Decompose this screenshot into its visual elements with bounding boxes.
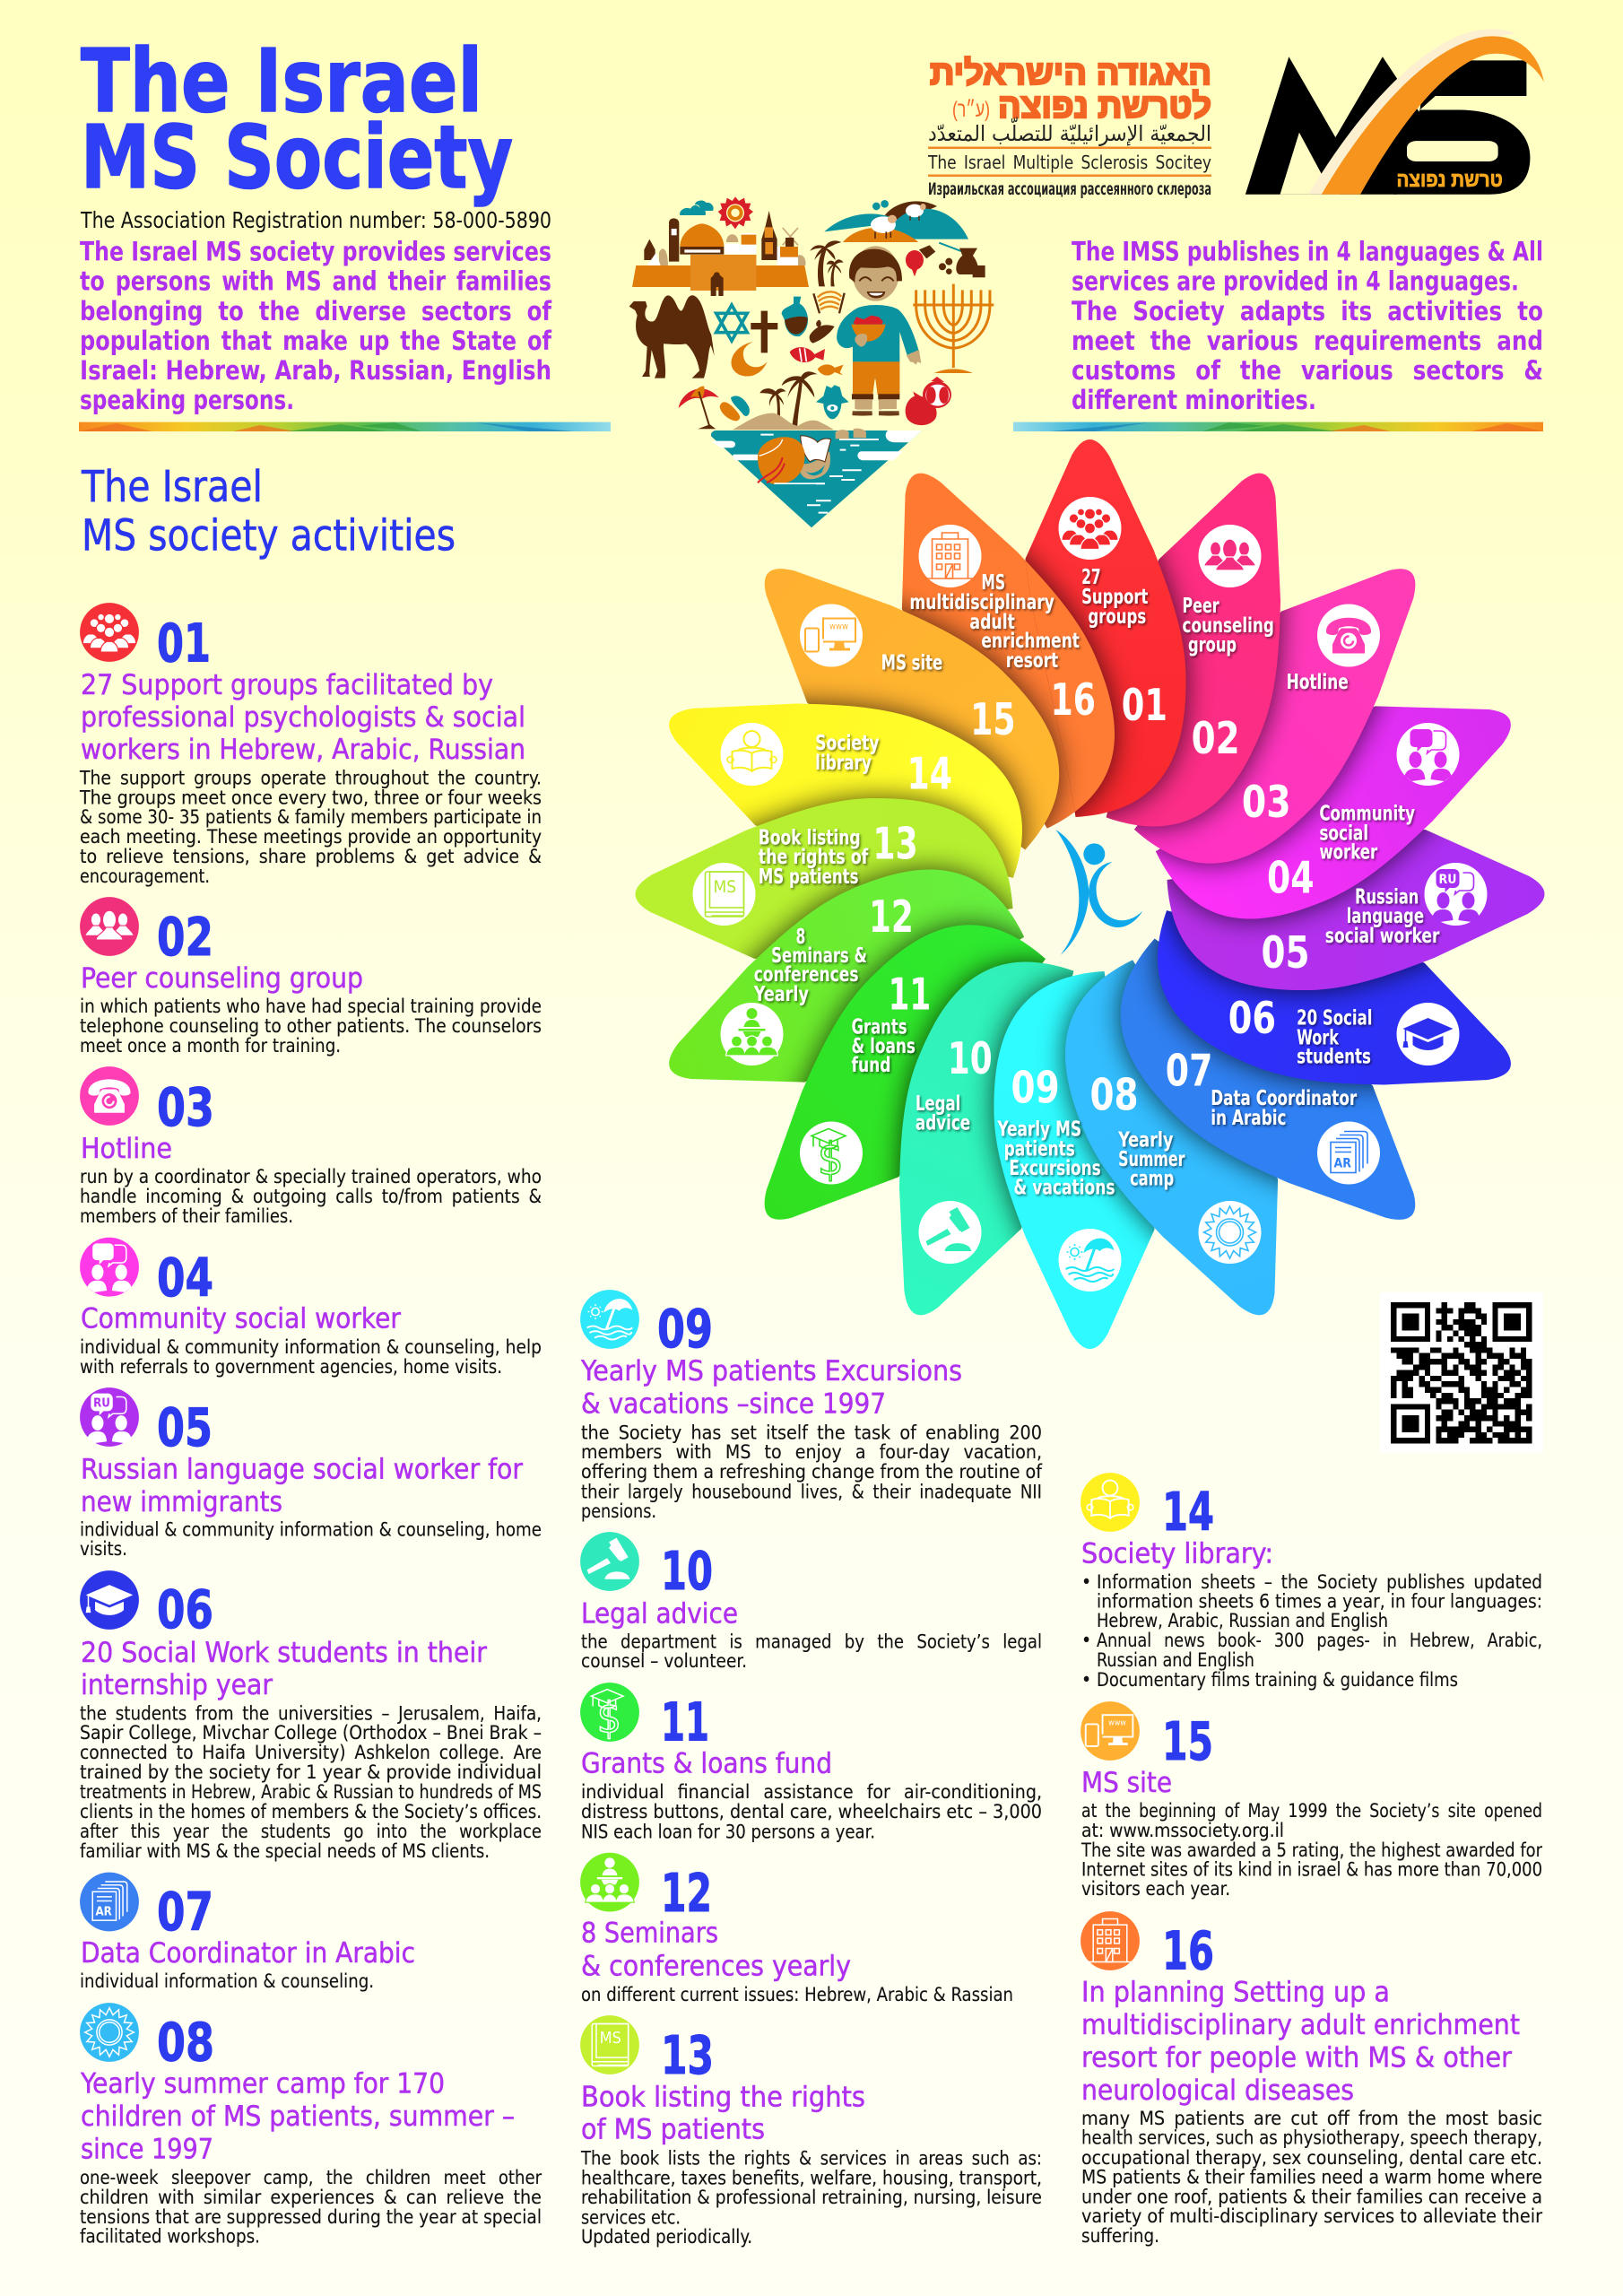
petal labels: worker <box>1319 839 1377 864</box>
petal numbers: 09 <box>1011 1063 1060 1114</box>
body 01: each meeting. These meetings provide an opportunity <box>80 826 542 848</box>
body 11: individual financial assistance for air-conditioning, <box>581 1781 1042 1803</box>
petal labels: fund <box>852 1052 891 1077</box>
body 16: suffering. <box>1081 2225 1159 2247</box>
petal labels: Support <box>1081 584 1148 609</box>
petal labels: Peer <box>1183 593 1219 618</box>
body 06: trained by the society for 1 year & provide individual <box>80 1761 542 1783</box>
heading 11: Grants & loans fund <box>581 1747 832 1779</box>
body 09: their largely housebound lives, & their inadequate NII <box>581 1482 1042 1503</box>
petal labels: adult <box>969 609 1015 634</box>
petal labels: camp <box>1130 1166 1174 1190</box>
icon: seminar <box>580 1853 639 1912</box>
petal numbers: 16 <box>1051 674 1096 726</box>
petal labels: 20 Social <box>1297 1005 1372 1030</box>
flower icons <box>692 497 1487 1292</box>
petal numbers: 06 <box>1228 993 1276 1044</box>
number 10: 10 <box>661 1540 713 1602</box>
icon: book <box>580 2015 639 2074</box>
petal labels: enrichment <box>981 628 1080 653</box>
heading 12: 8 Seminars <box>581 1918 718 1950</box>
intro text block right: customs of the various sectors & <box>1072 355 1543 386</box>
title: The Israel <box>81 30 482 132</box>
body 13: rehabilitation & professional retraining, nursing, leisure <box>581 2187 1042 2208</box>
icon: support groups <box>80 603 139 662</box>
body 02: in which patients who have had special training provide <box>80 996 542 1017</box>
number 13: 13 <box>661 2024 714 2086</box>
heading 01 <box>81 669 525 766</box>
body 14 bullets: Hebrew, Arabic, Russian and English <box>1097 1610 1388 1631</box>
petal labels: MS <box>981 570 1005 595</box>
body 06: the students from the universities – Jerusalem, Haifa, <box>80 1702 542 1724</box>
heading 13 <box>581 2081 865 2145</box>
QR code <box>1380 1292 1543 1453</box>
intro text block left: belonging to the diverse sectors of <box>80 296 552 326</box>
heading 08: since 1997 <box>81 2133 213 2165</box>
petal 08 <box>1045 960 1279 1315</box>
icon: russian language social worker <box>80 1387 139 1447</box>
intro text block left: Israel: Hebrew, Arab, Russian, English <box>80 355 551 386</box>
body 01: encouragement. <box>80 865 210 887</box>
body 03: handle incoming & outgoing calls to/from patients & <box>80 1186 542 1207</box>
petal labels: Russian <box>1355 883 1419 909</box>
icon: documents <box>80 1873 139 1931</box>
activity 13 <box>580 2015 1042 2248</box>
menorah <box>913 284 994 373</box>
petal numbers: 02 <box>1192 713 1240 765</box>
heading 03: Hotline <box>81 1133 172 1165</box>
number 11: 11 <box>661 1692 709 1753</box>
body 15: at: www.mssociety.org.il <box>1081 1820 1284 1841</box>
heading 08: children of MS patients, summer – <box>81 2100 515 2133</box>
petal 10 <box>879 942 1074 1315</box>
petal labels: MS patients <box>759 864 858 889</box>
multilingual society wordmark: לטרשת נפוצה <box>998 88 1211 126</box>
body 09: pensions. <box>581 1500 656 1522</box>
intro text block left <box>80 237 552 415</box>
heading 16: multidisciplinary adult enrichment <box>1081 2009 1520 2041</box>
petal 09 <box>994 971 1155 1349</box>
petal 11 <box>764 905 1046 1220</box>
body 14 bullets: Documentary films training & guidance films <box>1097 1669 1458 1691</box>
petal labels: Community <box>1319 800 1415 825</box>
number 07: 07 <box>157 1881 213 1943</box>
body 04: with referrals to government agencies, home visits. <box>80 1356 502 1378</box>
petal labels: Seminars & <box>771 943 867 968</box>
heading 08: Yearly summer camp for 170 <box>80 2068 445 2100</box>
body 06: familiar with MS & the special needs of MS clients. <box>80 1840 490 1862</box>
icon: sun <box>80 2003 139 2062</box>
activity 09 <box>580 1290 1043 1522</box>
activity 14 <box>1081 1473 1542 1691</box>
intro text block left: speaking persons. <box>80 385 294 415</box>
heading 16: resort for people with MS & other <box>1081 2041 1513 2074</box>
body 16: MS patients & their families need a warm home where <box>1081 2167 1542 2188</box>
heading 16 <box>1081 1977 1520 2107</box>
petal numbers: 15 <box>970 694 1016 745</box>
heading 05: Russian language social worker for <box>81 1454 524 1486</box>
petal labels: language <box>1347 903 1424 928</box>
body 14 bullets: • <box>1081 1571 1091 1593</box>
body 05: individual & community information & counseling, home <box>80 1519 542 1541</box>
heading 01: 27 Support groups facilitated by <box>81 669 493 701</box>
petal labels: advice <box>916 1109 970 1135</box>
body 14 bullets: Information sheets – the Society publishes updated <box>1097 1571 1542 1593</box>
heading 13: of MS patients <box>581 2113 765 2145</box>
petal labels: patients <box>1004 1136 1075 1161</box>
activity 05 <box>80 1387 542 1560</box>
sea and beach <box>711 413 922 527</box>
petal labels: conferences <box>754 961 858 987</box>
number 16: 16 <box>1162 1919 1214 1981</box>
body 15 <box>1081 1800 1542 1900</box>
petal 16 <box>856 438 1149 848</box>
body 06: treatments in Hebrew, Arabic & Russian to hundreds of MS <box>80 1781 542 1803</box>
activity 07 <box>80 1873 415 1992</box>
body 03 <box>80 1166 542 1227</box>
petal 16 overlap on petal 01 <box>723 438 1149 885</box>
heading 10: Legal advice <box>581 1598 738 1631</box>
heading 13: Book listing the rights <box>581 2081 865 2113</box>
body 16: variety of multi-disciplinary services to alleviate their <box>1081 2205 1542 2227</box>
petal 01 <box>1026 439 1186 817</box>
heading 09: Yearly MS patients Excursions <box>580 1355 962 1387</box>
body 03: members of their families. <box>80 1205 293 1227</box>
activity 12 <box>580 1853 1013 2005</box>
heading 08 <box>80 2068 515 2165</box>
petal 03 <box>1098 527 1480 908</box>
heading 12 <box>581 1918 851 1982</box>
body 06: connected to Haifa University) Ashkelon college. Are <box>80 1742 542 1763</box>
icon: devices <box>1081 1701 1140 1761</box>
intro text block left: population that make up the State of <box>80 326 552 356</box>
body 16: many MS patients are cut off from the most basic <box>1081 2108 1542 2129</box>
body 09: members with MS to enjoy a four-day vacation, <box>581 1441 1042 1463</box>
activity 06 <box>80 1570 542 1862</box>
religious symbols <box>716 305 777 377</box>
multilingual society wordmark: (ע״ר) <box>952 98 990 122</box>
heading 04: Community social worker <box>81 1303 402 1335</box>
body 02: telephone counseling to other patients. The counselors <box>80 1015 542 1037</box>
number 14: 14 <box>1162 1481 1214 1543</box>
body 01: The groups meet once every two, three or four weeks <box>79 787 542 809</box>
petal numbers <box>869 674 1315 1121</box>
body 15: at the beginning of May 1999 the Society’s site opened <box>1081 1800 1542 1822</box>
icon: graduation cap <box>80 1570 139 1630</box>
heading 09 <box>580 1355 962 1421</box>
body 07: individual information & counseling. <box>80 1970 374 1992</box>
petal labels: Yearly <box>753 981 809 1006</box>
petal labels: Work <box>1297 1024 1339 1049</box>
petal labels: Book listing <box>759 825 861 849</box>
petal 13 <box>635 798 1013 959</box>
number 15: 15 <box>1162 1710 1213 1772</box>
petal labels <box>753 564 1440 1199</box>
activity 04 <box>80 1238 542 1378</box>
body 10: counsel – volunteer. <box>581 1650 747 1672</box>
body 01: The support groups operate throughout the country. <box>79 768 542 789</box>
petal 14 <box>669 683 1042 878</box>
petal labels: social <box>1319 820 1368 845</box>
icon: hotline telephone <box>80 1066 139 1126</box>
body 16: health services, such as physiotherapy, speech therapy, <box>1081 2127 1542 2149</box>
body 11: NIS each loan for 30 persons a year. <box>581 1821 875 1842</box>
body 03: run by a coordinator & specially trained operators, who <box>80 1166 542 1187</box>
petal 12 <box>669 848 1024 1083</box>
multilingual society wordmark: Израильская ассоциация рассеянного склероза <box>928 179 1211 199</box>
petal labels: multidisciplinary <box>909 589 1055 614</box>
body 14 bullets: information sheets 6 times a year, in four languages: <box>1097 1591 1542 1613</box>
intro text block right: The IMSS publishes in 4 languages & All <box>1072 237 1543 267</box>
body 14 bullets: • <box>1081 1669 1091 1691</box>
petal labels: Summer <box>1118 1146 1185 1171</box>
petal labels: Excursions <box>1009 1155 1101 1180</box>
petal labels: Hotline <box>1287 669 1349 694</box>
number 02: 02 <box>157 906 213 968</box>
body 05 <box>80 1519 542 1560</box>
body 05: visits. <box>80 1538 127 1560</box>
body 13: The book lists the rights & services in areas such as: <box>580 2148 1042 2170</box>
petal 05 <box>1167 830 1545 990</box>
intro text block right: meet the various requirements and <box>1072 326 1543 356</box>
heading 06 <box>81 1637 488 1701</box>
number 05: 05 <box>157 1396 213 1458</box>
palms <box>759 240 844 426</box>
petal numbers: 10 <box>948 1033 993 1084</box>
body 16: under one roof, patients & their families can receive a <box>1081 2187 1542 2208</box>
camel <box>629 295 715 378</box>
icon: dollar and cap <box>580 1683 639 1744</box>
body 02 <box>80 996 542 1057</box>
petal labels: Grants <box>852 1014 907 1039</box>
rainbow bar left <box>79 422 611 431</box>
body 09 <box>581 1422 1043 1522</box>
body 04 <box>80 1336 542 1378</box>
body 15: visitors each year. <box>1081 1878 1230 1900</box>
petal labels: group <box>1188 632 1237 657</box>
body 08 <box>80 2167 542 2248</box>
intro text block left: to persons with MS and their families <box>80 266 551 297</box>
body 06: Sapir College, Mivchar College (Orthodox – Bnei Brak – <box>80 1722 542 1744</box>
multilingual society wordmark: The Israel Multiple Sclerosis Socitey <box>927 152 1211 173</box>
body 11: distress buttons, dental care, wheelchairs etc – 3,000 <box>581 1801 1042 1822</box>
multilingual society wordmark: الجمعيّة الإسرائيليّة للتصلّب المتعدّد <box>928 117 1211 146</box>
title: MS Society <box>81 107 513 208</box>
activity 15 <box>1081 1701 1542 1900</box>
flower center disc <box>1001 804 1180 984</box>
section heading: activities: The Israel <box>81 462 263 512</box>
body 08: children with similar experiences & can relieve the <box>80 2187 542 2208</box>
body 08: facilitated workshops. <box>80 2226 260 2248</box>
petal numbers: 14 <box>907 748 952 800</box>
petal numbers: 01 <box>1122 680 1167 731</box>
petal labels: MS site <box>881 650 942 674</box>
flower labels and numbers <box>753 564 1440 1199</box>
heading 06: 20 Social Work students in their <box>81 1637 488 1669</box>
body 14 bullets: Russian and English <box>1097 1649 1254 1671</box>
body 13: healthcare, taxes benefits, welfare, housing, transport, <box>581 2167 1042 2188</box>
heading 14: Society library: <box>1081 1537 1273 1570</box>
petal numbers: 13 <box>872 819 918 870</box>
flower diagram of 16 activities <box>633 438 1547 1351</box>
body 15: The site was awarded a 5 rating, the highest awarded for <box>1081 1839 1542 1861</box>
body 12: on different current issues: Hebrew, Arabic & Rassian <box>581 1984 1013 2005</box>
body 14 bullets <box>1081 1571 1542 1691</box>
petal 06 <box>1137 910 1511 1105</box>
title <box>81 30 513 208</box>
activity 08 <box>80 2003 542 2248</box>
petal labels: social worker <box>1325 923 1440 948</box>
activity 02 <box>80 897 542 1057</box>
hamsa <box>816 385 849 419</box>
body 13 <box>580 2148 1042 2248</box>
center emblem <box>1055 830 1142 955</box>
heading 15: MS site <box>1081 1767 1172 1799</box>
activity 11 <box>580 1683 1042 1842</box>
intro text block right: services are provided in 4 languages. <box>1072 266 1519 297</box>
heading 07: Data Coordinator in Arabic <box>81 1937 415 1970</box>
number 12: 12 <box>661 1862 712 1924</box>
petal labels: the rights of <box>759 844 869 869</box>
petal labels: in Arabic <box>1211 1105 1287 1130</box>
body 01 <box>79 768 542 887</box>
icon: reader <box>1081 1473 1140 1532</box>
petal numbers: 08 <box>1089 1069 1139 1121</box>
body 06: after this year the students go into the workplace <box>80 1821 542 1842</box>
heading 06: internship year <box>81 1669 273 1701</box>
petal labels: Data Coordinator <box>1211 1085 1357 1110</box>
activity 03 <box>80 1066 542 1227</box>
grapes coffee <box>906 243 985 277</box>
icon: community social worker <box>80 1238 139 1297</box>
city skyline <box>632 211 809 296</box>
petal numbers: 03 <box>1242 777 1291 829</box>
petal labels: 8 <box>796 924 805 949</box>
body 11 <box>581 1781 1042 1842</box>
petal labels: Yearly <box>1117 1127 1173 1152</box>
number 08: 08 <box>157 2011 214 2074</box>
rainbow bar right <box>1013 422 1543 431</box>
petal labels: & loans <box>852 1033 916 1058</box>
multilingual society wordmark: האגודה הישראלית <box>930 55 1211 92</box>
petal numbers: 11 <box>889 969 931 1021</box>
MS logo <box>1245 29 1544 195</box>
petal 07 <box>1101 938 1415 1220</box>
body 16: occupational therapy, sex counseling, dental care etc. <box>1081 2147 1542 2169</box>
petal 15 <box>764 569 1074 850</box>
body 10: the department is managed by the Society’s legal <box>581 1631 1042 1652</box>
body 13: services etc. <box>581 2207 681 2229</box>
body 14 bullets: • <box>1081 1630 1091 1651</box>
heading 02: Peer counseling group <box>81 962 363 995</box>
number 01: 01 <box>157 612 211 674</box>
intro text block right: The Society adapts its activities to <box>1072 296 1543 326</box>
icon: beach <box>580 1290 639 1349</box>
body 08: one-week sleepover camp, the children meet other <box>80 2167 542 2188</box>
jug olive scroll fish <box>782 291 845 376</box>
body 01: & some 30- 35 patients & family members participate in <box>80 806 542 828</box>
section heading: activities: MS society activities <box>82 511 456 561</box>
icon: peer counseling <box>80 897 139 956</box>
registration number: The Association Registration number: 58-000-5890 <box>80 207 551 233</box>
heading 16: neurological diseases <box>1081 2074 1354 2107</box>
petal numbers: 12 <box>869 891 914 944</box>
icon: building <box>1081 1911 1140 1970</box>
section heading: activities <box>81 462 456 561</box>
body 06 <box>80 1702 542 1862</box>
petal labels: students <box>1297 1044 1371 1068</box>
body 13: Updated periodically. <box>581 2226 752 2248</box>
boy figure <box>837 246 921 416</box>
petal labels: groups <box>1088 604 1146 629</box>
activity 16 <box>1081 1911 1542 2247</box>
body 14 bullets: Annual news book- 300 pages- in Hebrew, Arabic, <box>1097 1630 1542 1651</box>
body 10 <box>581 1631 1042 1672</box>
petal 04 <box>1155 706 1511 940</box>
petal labels: library <box>815 750 872 775</box>
activity 01 <box>79 603 542 887</box>
petal numbers: 04 <box>1267 852 1315 904</box>
body 16 <box>1081 2108 1542 2247</box>
body 08: tensions that are suppressed during the year at special <box>80 2206 542 2228</box>
heart illustration <box>629 196 994 527</box>
body 06: clients in the homes of members & the Society’s offices. <box>80 1801 542 1822</box>
heading 01: professional psychologists & social <box>81 701 525 734</box>
petal labels: Legal <box>916 1091 960 1116</box>
petal numbers: 07 <box>1166 1045 1212 1097</box>
petal labels: & vacations <box>1013 1175 1115 1199</box>
petal labels: Yearly MS <box>997 1117 1081 1141</box>
heading 09: & vacations –since 1997 <box>581 1388 886 1421</box>
MS logo: טרשת נפוצה <box>1396 169 1503 191</box>
body 09: offering them a refreshing change from the routine of <box>581 1461 1043 1483</box>
hills and sheep <box>824 200 968 242</box>
petal labels: Society <box>815 730 880 755</box>
heading 05 <box>81 1454 524 1518</box>
number 03: 03 <box>157 1076 214 1138</box>
pomegranate <box>906 377 951 425</box>
body 09: the Society has set itself the task of enabling 200 <box>581 1422 1042 1444</box>
body 02: meet once a month for training. <box>80 1035 341 1057</box>
umbrella sandals <box>679 387 750 429</box>
body 01: to relieve tensions, share problems & get advice & <box>80 846 542 867</box>
petal 02 <box>1060 449 1352 860</box>
heading 05: new immigrants <box>81 1486 282 1518</box>
petal labels: resort <box>1006 648 1058 673</box>
icon: gavel <box>580 1532 639 1591</box>
body 04: individual & community information & counseling, help <box>80 1336 542 1358</box>
petal numbers: 05 <box>1261 927 1310 978</box>
heading 12: & conferences yearly <box>581 1950 851 1982</box>
intro text block left: The Israel MS society provides services <box>80 237 551 267</box>
body 15: Internet sites of its kind in israel & has more than 70,000 <box>1081 1859 1542 1881</box>
number 06: 06 <box>157 1578 213 1640</box>
petal labels: 27 <box>1081 564 1101 589</box>
clouds and sun <box>680 196 753 229</box>
activity 10 <box>580 1532 1042 1672</box>
petal labels: counseling <box>1183 613 1274 638</box>
intro text block right <box>1072 237 1543 415</box>
number 04: 04 <box>157 1247 213 1309</box>
multilingual society wordmark <box>927 55 1211 199</box>
number 09: 09 <box>657 1298 713 1360</box>
heading 01: workers in Hebrew, Arabic, Russian <box>81 734 525 766</box>
heading 16: In planning Setting up a <box>1081 1977 1390 2009</box>
intro text block right: different minorities. <box>1072 385 1316 415</box>
